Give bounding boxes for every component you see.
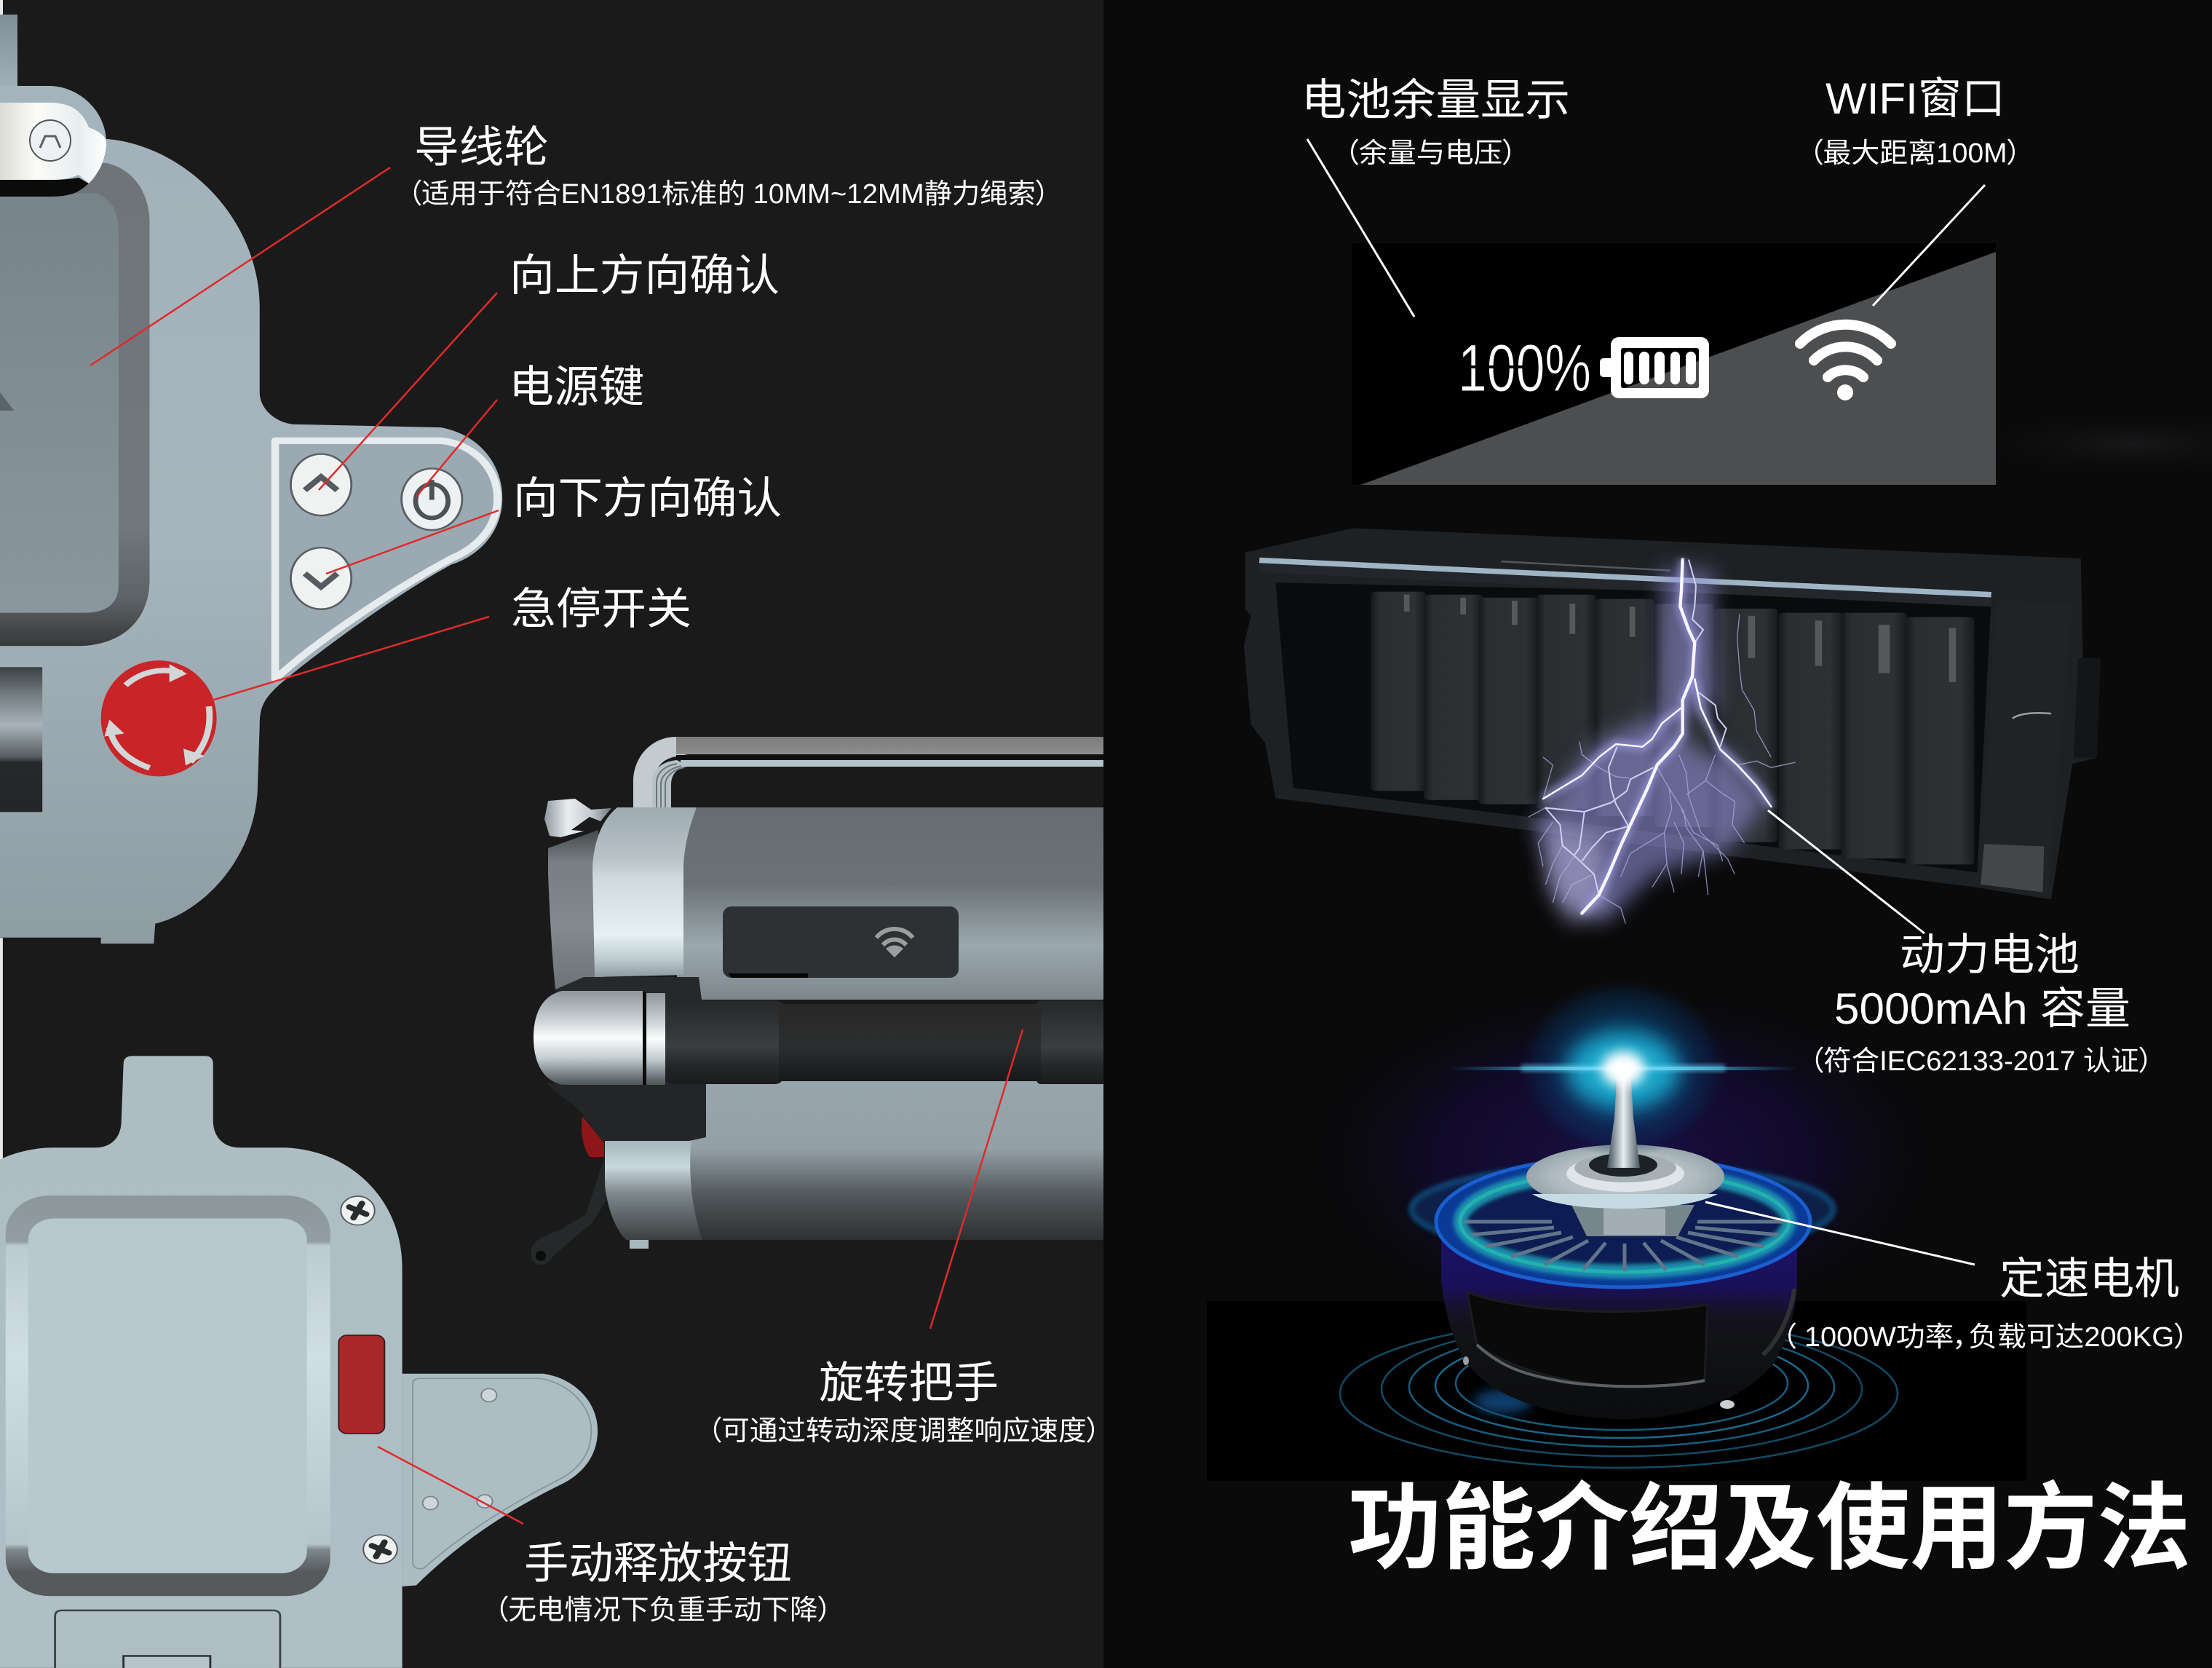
icon: battery [1600, 337, 1709, 398]
status window [723, 906, 959, 978]
label: manual release: （无电情况下负重手动下降） [494, 1595, 832, 1626]
black upper bracket [555, 977, 702, 1008]
label: manual release: 手动释放按钮 [524, 1539, 792, 1588]
label: rotating handle: 旋转把手 [819, 1359, 999, 1407]
floor ripples [1340, 1319, 1898, 1468]
panel: rear plate view [0, 938, 598, 1668]
label: power battery: 动力电池 [1900, 930, 2080, 979]
label: power battery: 5000mAh 容量 [1834, 984, 2130, 1033]
battery cells [1371, 592, 1974, 864]
black backing block [1207, 1301, 2026, 1481]
panel: right background [1103, 0, 2212, 1668]
hub [1526, 1145, 1724, 1236]
red tab [582, 1116, 604, 1157]
lower end cap [605, 1136, 702, 1240]
icon: wifi small [876, 929, 913, 957]
icon: guide wheel hinge [0, 86, 106, 197]
spokes [1464, 1222, 1785, 1271]
label: guide wheel: 导线轮 [414, 123, 549, 172]
plate [0, 139, 502, 944]
label: guide wheel: （适用于符合EN1891标准的 10MM~12MM静力绳索） [408, 179, 1050, 210]
panel: motor illustration [1207, 979, 2026, 1481]
side flange [403, 1374, 598, 1586]
lever [531, 1158, 606, 1265]
icon: up button [290, 454, 352, 515]
medium branches [1545, 560, 1727, 895]
display recess [0, 163, 150, 646]
label: wifi window: WIFI窗口 [1826, 74, 2005, 123]
label: rotating handle [707, 1359, 1101, 1447]
plate body [0, 1056, 403, 1668]
callout leader lines: white [1307, 139, 1985, 1265]
black lower bracket [547, 1081, 706, 1141]
glow [1534, 570, 1767, 924]
label: power battery [1809, 930, 2153, 1077]
top carry handle [633, 737, 1103, 807]
motor housing [1441, 1223, 1797, 1419]
label: wifi window [1809, 74, 2021, 169]
bolt glow [1543, 560, 1771, 913]
label: battery level display: （余量与电压） [1344, 138, 1517, 169]
knob [544, 799, 611, 837]
control panel with white outline [275, 440, 497, 679]
fine branches [1529, 614, 1796, 924]
title: 功能介绍及使用方法 [1348, 1475, 2191, 1581]
label: guide wheel [408, 123, 1050, 210]
side slider [0, 667, 42, 812]
label: power key: 电源键 [509, 363, 644, 411]
panel: lightning bolt [1529, 560, 1796, 924]
rotating grip [665, 1000, 1109, 1084]
label: battery level display [1301, 76, 1570, 169]
bottom compartment [55, 1610, 280, 1668]
icon: screw top [341, 1196, 375, 1225]
label: battery level display: 电池余量显示 [1301, 76, 1570, 124]
panel: left background [0, 0, 1103, 1668]
lower body [684, 1081, 1106, 1240]
label: power battery: （符合IEC62133-2017 认证） [1809, 1046, 2153, 1077]
panel: top device front view [0, 0, 502, 944]
label: confirm down: 向下方向确认 [513, 474, 782, 523]
icon: screw bottom [363, 1535, 397, 1564]
label: fixed speed motor: 定速电机 [1999, 1254, 2179, 1303]
callout leader lines: red [90, 167, 1023, 1524]
silver roller end [534, 991, 643, 1085]
main bolt [1543, 560, 1771, 913]
label: emergency stop: 急停开关 [511, 585, 691, 633]
battery casing [1244, 529, 2101, 900]
orbit glow [1411, 1164, 1834, 1254]
icon: power button [402, 468, 462, 530]
silver end cap [592, 807, 697, 977]
label: fixed speed motor: （ 1000W功率，负载可达200KG） [1782, 1322, 2189, 1353]
purple backdrop [1304, 983, 1945, 1332]
foot [630, 1240, 649, 1249]
label: rotating handle: （可通过转动深度调整响应速度） [707, 1416, 1101, 1447]
icon: emergency stop button [101, 660, 217, 776]
right compartment [1979, 601, 2101, 893]
label: manual release [494, 1539, 832, 1626]
panel: battery pack [1244, 529, 2101, 900]
icon: manual release button [338, 1335, 384, 1434]
rear plate [548, 830, 604, 989]
label: confirm up: 向上方向确认 [510, 251, 780, 300]
blue energy rings [1436, 1156, 1810, 1287]
panel: battery and wifi display [1352, 243, 1996, 485]
icon: down button [290, 548, 352, 609]
icon: wifi [1800, 325, 1891, 400]
glowing shaft [1448, 979, 1799, 1168]
recessed window [6, 1195, 330, 1596]
panel: handle side view [531, 737, 1109, 1265]
upper body [677, 807, 1106, 1000]
label: wifi window: （最大距离100M） [1809, 138, 2021, 169]
battery percentage: 100% [1458, 331, 1591, 406]
label: fixed speed motor [1782, 1254, 2189, 1353]
